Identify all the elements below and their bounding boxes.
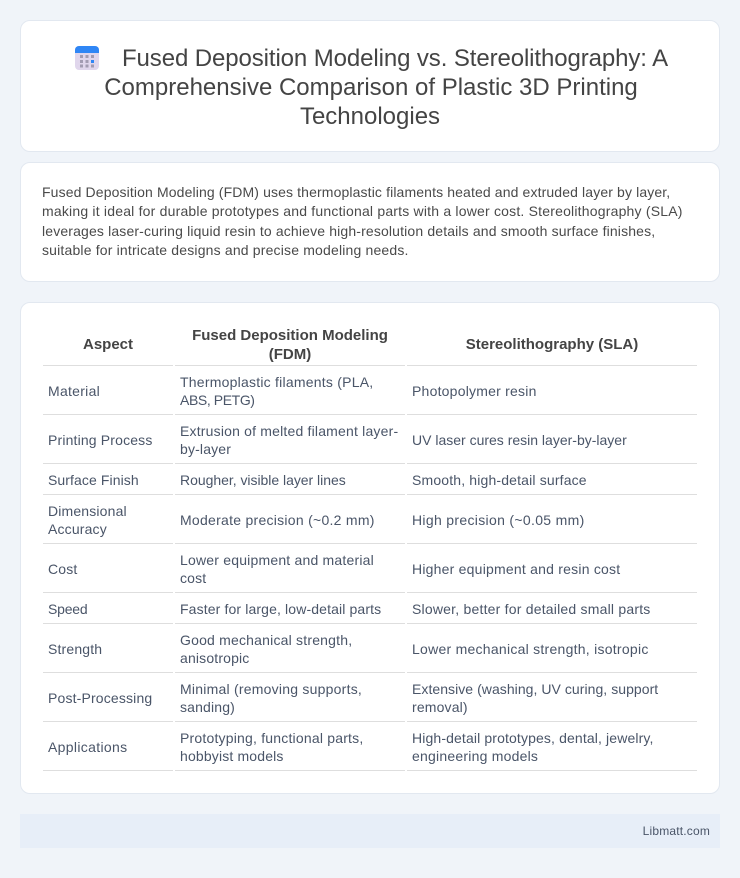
text: Accuracy	[48, 521, 107, 537]
title: Fused Deposition Modeling vs. Stereolithography: A	[122, 45, 668, 72]
icon: calendar	[75, 46, 99, 70]
title: Comprehensive Comparison of Plastic 3D Printing	[104, 74, 638, 101]
text block: description	[42, 184, 683, 258]
table header	[43, 327, 697, 366]
row: Strength	[43, 632, 697, 673]
text: Moderate precision (~0.2 mm)	[180, 512, 375, 528]
text: Prototyping, functional parts,	[180, 730, 363, 746]
table header: Aspect	[83, 336, 133, 353]
text: UV laser cures resin layer-by-layer	[412, 432, 627, 448]
row: Speed	[43, 601, 697, 624]
text block: description: leverages laser-curing liquid resin to achieve high-resolution details and smooth surface finishes,	[42, 223, 655, 239]
row: Applications	[43, 730, 697, 771]
title	[104, 45, 668, 130]
panel: description	[20, 162, 720, 282]
text: Rougher, visible layer lines	[180, 472, 346, 488]
text: High precision (~0.05 mm)	[412, 512, 585, 528]
footer	[20, 814, 720, 848]
title: Technologies	[300, 103, 440, 130]
panel: title card	[20, 20, 720, 152]
row: Post-Processing	[43, 681, 697, 722]
row: Material	[43, 374, 697, 415]
text: hobbyist models	[180, 748, 284, 764]
text: Printing Process	[48, 432, 152, 448]
text: Photopolymer resin	[412, 383, 537, 399]
text: Extrusion of melted filament layer-	[180, 423, 398, 439]
text: Applications	[48, 739, 127, 755]
text: Material	[48, 383, 100, 399]
text: Slower, better for detailed small parts	[412, 601, 651, 617]
text: Good mechanical strength,	[180, 632, 352, 648]
table header: (FDM)	[269, 346, 311, 363]
row: Cost	[43, 552, 697, 593]
text: Lower equipment and material	[180, 552, 374, 568]
text: Lower mechanical strength, isotropic	[412, 641, 649, 657]
text: cost	[180, 570, 206, 586]
text: Cost	[48, 561, 77, 577]
text: Dimensional	[48, 503, 127, 519]
text block: description: Fused Deposition Modeling (FDM) uses thermoplastic filaments heated and extruded layer by layer,	[42, 184, 670, 200]
text: sanding)	[180, 699, 235, 715]
text: High-detail prototypes, dental, jewelry,	[412, 730, 654, 746]
text block: description: suitable for intricate designs and precise modeling needs.	[42, 242, 409, 258]
text: Thermoplastic filaments (PLA,	[180, 374, 373, 390]
row: Printing Process	[43, 423, 697, 464]
row: Dimensional Accuracy	[43, 503, 697, 544]
text: Extensive (washing, UV curing, support	[412, 681, 658, 697]
text: Surface Finish	[48, 472, 139, 488]
text: Smooth, high-detail surface	[412, 472, 587, 488]
text: Faster for large, low-detail parts	[180, 601, 381, 617]
text: Minimal (removing supports,	[180, 681, 362, 697]
text: removal)	[412, 699, 468, 715]
text block: description: making it ideal for durable prototypes and functional parts with a lower cost. Stereolithography (SLA)	[42, 203, 683, 219]
panel: comparison table	[20, 302, 720, 794]
text: ABS, PETG)	[180, 392, 255, 408]
text: Post-Processing	[48, 690, 152, 706]
text: Strength	[48, 641, 102, 657]
text: Higher equipment and resin cost	[412, 561, 620, 577]
table header: Fused Deposition Modeling	[192, 327, 388, 344]
text: Speed	[48, 601, 87, 617]
row: Surface Finish	[43, 472, 697, 495]
footer: Libmatt.com	[643, 824, 710, 838]
text: engineering models	[412, 748, 538, 764]
table header: Stereolithography (SLA)	[466, 336, 638, 353]
text: by-layer	[180, 441, 231, 457]
text: anisotropic	[180, 650, 249, 666]
